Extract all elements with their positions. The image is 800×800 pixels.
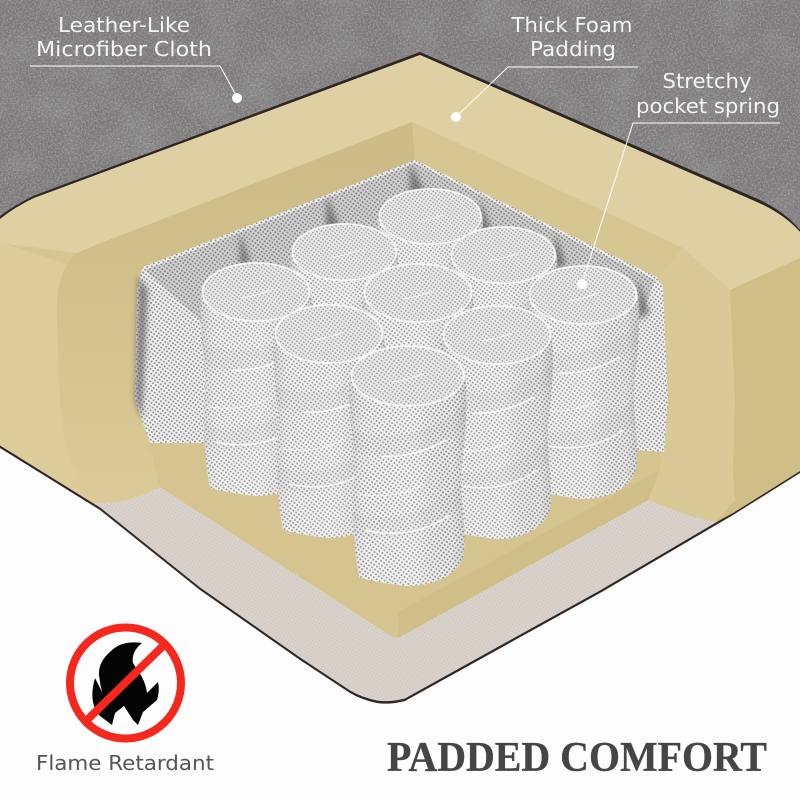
foam floor (137, 270, 663, 637)
foam left outer face (0, 242, 93, 503)
panel: pocket spring cavity (135, 160, 668, 452)
spring row 2 left (286, 223, 403, 456)
spring front (345, 345, 471, 592)
panel: beige base fabric (0, 398, 800, 701)
callout: thick foam padding (451, 13, 638, 122)
foam top band (0, 55, 800, 290)
callout: leather-like microfiber cloth (30, 13, 242, 103)
label: flame retardant: Flame Retardant (36, 751, 214, 775)
callout: stretchy pocket spring: pocket spring (636, 94, 780, 118)
springs: pocket spring rows (196, 188, 643, 592)
spring row 1 (373, 188, 487, 416)
spring row 2 right (445, 226, 562, 459)
icon: flame retardant (70, 628, 181, 738)
callout: stretchy pocket spring: Stretchy (662, 69, 752, 93)
foam upper right slope (412, 122, 683, 277)
foam right inner face (412, 122, 735, 522)
panel: grey microfiber cloth (0, 0, 800, 240)
callout: leather-like microfiber cloth: Leather-Like (58, 13, 190, 37)
spring row 3 middle (358, 263, 478, 503)
foam floor front face (398, 470, 660, 638)
panel: foam padding (0, 55, 800, 638)
foam left cut face (57, 122, 415, 503)
foam right outer face (716, 258, 800, 522)
icon: flame (92, 642, 159, 725)
callout: thick foam padding: Thick Foam (510, 13, 632, 37)
title: PADDED COMFORT (387, 735, 767, 781)
spring row 4 right (437, 305, 557, 545)
cavity shadow gaps (135, 164, 650, 420)
spring row 4 left (269, 304, 389, 544)
spring row 3 right (523, 265, 643, 505)
foam base fill (0, 55, 800, 638)
callout: leather-like microfiber cloth: Microfiber Cloth (36, 37, 212, 61)
spring row 3 left (196, 262, 316, 502)
callout: stretchy pocket spring (577, 69, 780, 289)
callout: thick foam padding: Padding (530, 37, 616, 61)
